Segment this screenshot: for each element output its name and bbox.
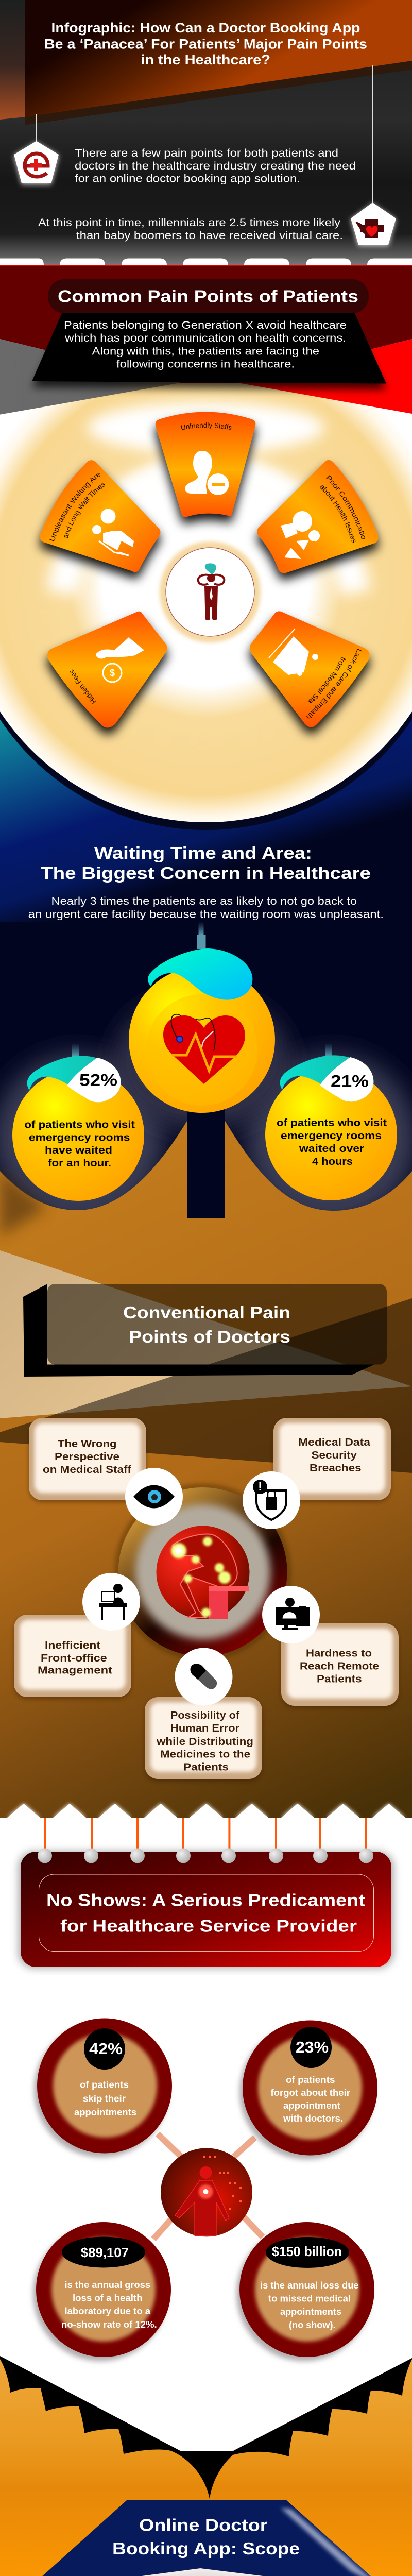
pain card: human error: Human Error	[170, 1723, 239, 1734]
stat circle: 89,107 dollars	[36, 2222, 171, 2357]
panel: waiting time heading	[41, 843, 371, 883]
petal: poor communication	[249, 459, 386, 588]
petal: unfriendly staffs	[147, 410, 264, 532]
dark wedge	[0, 1298, 412, 1473]
heading box: conventional pain points of doctors: Points of Doctors	[129, 1327, 290, 1346]
icon circle: shield lock	[243, 1471, 300, 1529]
tan light wedge	[0, 1250, 412, 1418]
section intro text: Patients belonging to Generation X avoid healthcare	[64, 319, 347, 331]
heading: online doctor booking app scope	[26, 2500, 387, 2576]
left balloon: 52 percent: for an hour.	[48, 1158, 111, 1169]
section heading pill: Common Pain Points of Patients	[58, 286, 358, 306]
centre ring: body in pain	[114, 1483, 291, 1660]
scope text card	[25, 2568, 387, 2576]
pain card: hardness to reach remote patients: Reach Remote	[300, 1660, 379, 1672]
icon circle: front desk	[82, 1573, 140, 1631]
icon: seated person and clock	[101, 509, 115, 523]
stat circle: 23 percent	[243, 2021, 377, 2156]
title	[44, 20, 367, 67]
stat circle: 150 billion dollars: to missed medical	[268, 2294, 351, 2304]
section intro text: which has poor communication on health concerns.	[64, 332, 346, 344]
stat circle: 42 percent: appointments	[74, 2107, 136, 2117]
panel: scope section	[0, 2356, 412, 2576]
icon: person with minus	[185, 451, 212, 494]
stat circle: 23 percent: with doctors.	[283, 2113, 343, 2124]
pain card: wrong perspective: on Medical Staff	[43, 1464, 131, 1476]
section intro text: following concerns in healthcare.	[116, 358, 295, 370]
connector bars	[153, 2134, 263, 2239]
stat circle: 42 percent: skip their	[83, 2094, 126, 2104]
icon: shelves and dots	[269, 629, 295, 658]
icon: heart with pulse	[163, 1015, 245, 1084]
panel: common pain points of patients	[0, 265, 412, 949]
waiting dark background with balloons glow	[0, 895, 412, 1262]
waiting dark background with balloons glow: an urgent care facility because the waiting room was unpleasant.	[28, 909, 384, 921]
pain card: wrong perspective: Perspective	[55, 1451, 119, 1463]
petal: hidden fees	[39, 611, 175, 742]
intro paragraph one: doctors in the healthcare industry creating the need	[75, 160, 356, 172]
right balloon: 21 percent: emergency rooms	[281, 1130, 382, 1142]
petal: lack of care and empathy	[242, 610, 377, 742]
heading: online doctor booking app scope: Online Doctor	[139, 2516, 268, 2535]
intro paragraph one: for an online doctor booking app solution.	[75, 173, 300, 185]
black text trapezoid	[32, 313, 386, 383]
title: in the Healthcare?	[141, 52, 270, 67]
main balloon: heart	[129, 922, 275, 1113]
centre circle: digital human	[161, 2148, 252, 2236]
stat circle: 89,107 dollars: laboratory due to a	[65, 2306, 151, 2316]
stat circle: 150 billion dollars: $150 billion	[272, 2244, 342, 2259]
heading box: conventional pain points of doctors: Conventional Pain	[123, 1303, 290, 1322]
stat circle: 42 percent: of patients	[80, 2079, 129, 2090]
panel: ground and doctors section	[0, 922, 412, 1818]
stat circle: 150 billion dollars: appointments	[280, 2307, 341, 2317]
white scallop row	[0, 259, 412, 265]
section intro text	[64, 319, 347, 370]
heading box: conventional pain points of doctors	[23, 1284, 387, 1377]
right balloon: 21 percent: 21%	[331, 1072, 369, 1091]
petal: unpleasant waiting area: and Long Wait Times	[64, 483, 105, 538]
petal: lack of care and empathy: from Medical Staff	[307, 657, 346, 703]
stat circle: 42 percent: 42%	[89, 2040, 123, 2058]
centre circle: stressed person	[160, 541, 261, 642]
zigzag white edge	[7, 1804, 405, 1818]
icon circle: remote doctor	[262, 1586, 320, 1643]
pain card: human error: Possibility of	[170, 1710, 239, 1721]
panel: intro dark background	[0, 0, 412, 266]
black zigzag band	[0, 2356, 412, 2504]
petal: unfriendly staffs: Unfriendly Staffs	[181, 422, 232, 430]
orange scallop right	[210, 2359, 412, 2576]
title: Be a ‘Panacea’ For Patients’ Major Pain Points	[44, 36, 367, 52]
icon: speech bubbles	[281, 523, 298, 538]
pain card: wrong perspective: The Wrong	[58, 1438, 116, 1450]
intro paragraph two	[38, 217, 343, 242]
pain card: human error	[145, 1697, 262, 1782]
banner shadow band	[25, 52, 412, 125]
heading board: no shows: No Shows: A Serious Predicament	[46, 1891, 365, 1910]
petal: poor communication: about Health Issues	[320, 485, 355, 543]
intro paragraph one	[75, 147, 356, 185]
intro paragraph two: At this point in time, millennials are 2.5 times more likely	[38, 217, 341, 229]
stat circle: 89,107 dollars: loss of a health	[73, 2293, 142, 2303]
title: Infographic: How Can a Doctor Booking App	[52, 20, 360, 36]
stat circle: 150 billion dollars	[239, 2222, 374, 2357]
black trapezoid shadow	[32, 328, 386, 389]
stat circle: 150 billion dollars: is the annual loss due	[260, 2280, 359, 2291]
pain card: hardness to reach remote patients: Hardness to	[306, 1648, 372, 1659]
stem under main balloon	[187, 1097, 225, 1218]
left balloon: 52 percent: of patients who visit	[24, 1120, 135, 1131]
red wedge	[238, 339, 412, 414]
pain card: medical data security: Medical Data	[298, 1437, 371, 1448]
pain card: inefficient front office	[14, 1615, 131, 1699]
navy background	[0, 711, 412, 928]
figure skeleton	[171, 1534, 249, 1619]
petal: unpleasant waiting area	[32, 460, 168, 586]
grey wedge	[0, 339, 180, 415]
panel: no shows background	[0, 1818, 412, 2364]
stat circle: 23 percent: of patients	[286, 2075, 335, 2085]
wheel shadow disc	[0, 335, 412, 830]
petal: lack of care and empathy: Lack of Care and Empathy	[306, 649, 362, 718]
pain card: human error: while Distributing	[156, 1736, 253, 1748]
intro paragraph one: There are a few pain points for both patients and	[75, 147, 338, 159]
hanging beads	[38, 1849, 373, 1863]
panel: waiting time heading: The Biggest Concern in Healthcare	[41, 863, 371, 883]
title banner	[25, 0, 412, 117]
stat circle: 150 billion dollars: (no show).	[289, 2320, 336, 2330]
section intro text: Along with this, the patients are facing the	[92, 345, 319, 358]
waiting dark background with balloons glow: Nearly 3 times the patients are as likely to not go back to	[52, 895, 357, 907]
stat circle: 89,107 dollars: no-show rate of 12%.	[61, 2319, 157, 2330]
left balloon: 52 percent: 52%	[79, 1071, 117, 1089]
heading board: no shows: for Healthcare Service Provider	[60, 1917, 357, 1935]
orange scallop left	[0, 2359, 210, 2576]
panel: waiting time heading: Waiting Time and Area:	[94, 843, 312, 862]
right balloon: 21 percent: waited over	[299, 1143, 364, 1155]
right balloon: 21 percent	[265, 1043, 397, 1200]
icon circle: pill	[175, 1648, 233, 1705]
heading: online doctor booking app scope: Booking App: Scope	[112, 2539, 300, 2558]
pain card: hardness to reach remote patients	[281, 1623, 399, 1708]
pain card: inefficient front office: Front-office	[41, 1653, 107, 1664]
right balloon: 21 percent: of patients who visit	[277, 1117, 387, 1129]
hanging icon: heart and cross	[351, 65, 396, 245]
petal: hidden fees: $	[110, 668, 115, 678]
stat circle: 23 percent: appointment	[283, 2100, 340, 2111]
stat circle: 23 percent: forgot about their	[271, 2088, 350, 2098]
stat circle: 23 percent: 23%	[296, 2038, 329, 2056]
pain card: human error: Patients	[183, 1762, 229, 1773]
pain card: medical data security: Breaches	[310, 1463, 362, 1474]
red top band	[0, 266, 412, 383]
section heading pill	[48, 279, 369, 313]
stat circle: 42 percent	[37, 2019, 172, 2154]
right balloon: 21 percent: 4 hours	[312, 1156, 353, 1167]
petal: hidden fees: Hidden Fees	[70, 670, 97, 704]
pain card: wrong perspective	[29, 1418, 146, 1502]
orange strings	[44, 1818, 367, 1849]
left blurred strip	[0, 0, 25, 120]
stat circle: 89,107 dollars: $89,107	[81, 2245, 129, 2260]
left balloon: 52 percent: have waited	[45, 1145, 112, 1156]
heading board: no shows	[19, 1818, 393, 1968]
wheel disc	[0, 328, 412, 822]
ground shape	[0, 1121, 412, 1818]
pain card: inefficient front office: Management	[38, 1665, 112, 1676]
icon circle: eye	[125, 1468, 183, 1526]
pain card: hardness to reach remote patients: Patients	[317, 1674, 362, 1685]
pain card: inefficient front office: Inefficient	[45, 1640, 100, 1651]
pain card: human error: Medicines to the	[160, 1749, 250, 1760]
left balloon: 52 percent	[12, 1043, 144, 1201]
petal: poor communication: Poor Communication	[326, 475, 366, 539]
pain card: medical data security	[273, 1418, 391, 1502]
icon: hand and coin	[96, 637, 144, 658]
left balloon: 52 percent: emergency rooms	[29, 1132, 130, 1144]
stat circle: 89,107 dollars: is the annual gross	[65, 2280, 150, 2290]
pain card: medical data security: Security	[312, 1450, 357, 1461]
intro paragraph two: than baby boomers to have received virtual care.	[76, 230, 343, 242]
hanging icon: medical e logo	[14, 114, 59, 183]
